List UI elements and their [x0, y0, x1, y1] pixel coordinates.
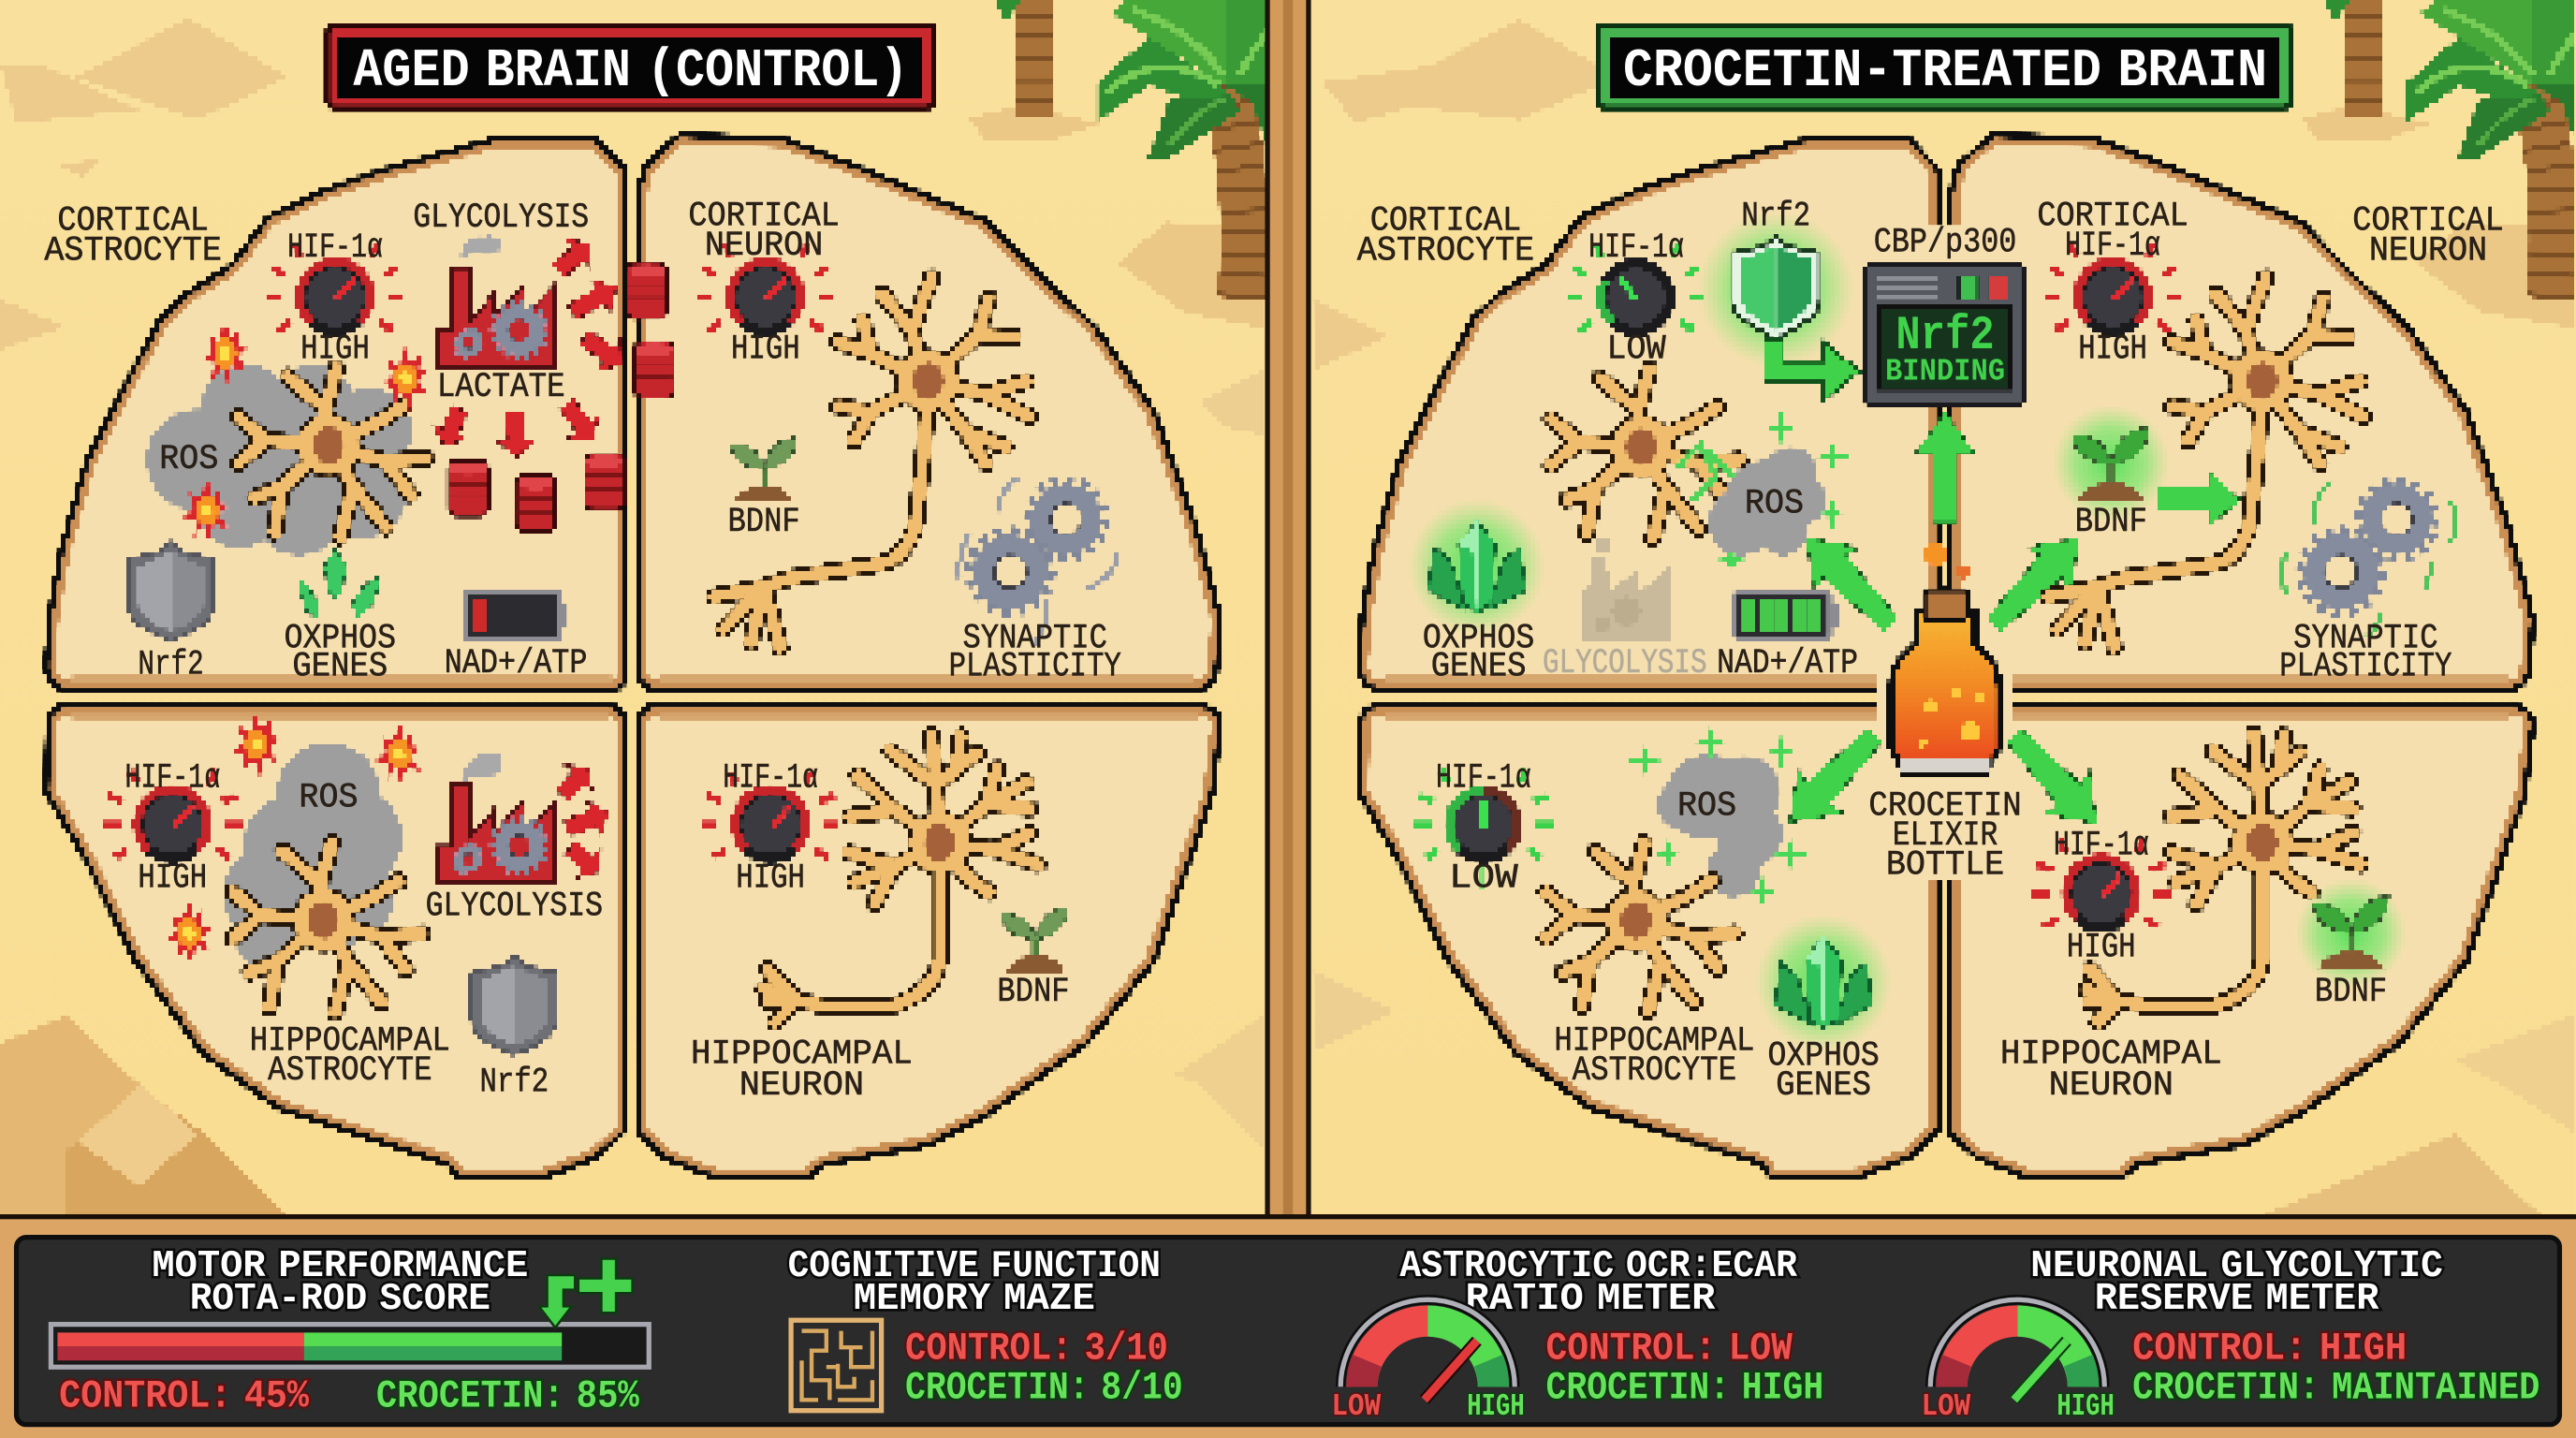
label: NAD+/ATP: NAD+/ATP [1717, 644, 1858, 683]
label: high: HIGH [2067, 928, 2136, 967]
explosions: ROS damage [184, 320, 429, 544]
label: plasticity: PLASTICITY [949, 647, 1121, 686]
icon: cortical astrocyte cell [238, 368, 427, 537]
label: Nrf2: Nrf2 [479, 1063, 549, 1102]
label: cortical neuron: CORTICAL [688, 197, 840, 236]
panel: aged brain control [44, 23, 1214, 1171]
glycolysis arrows hippocampal [548, 755, 615, 887]
icon: hippocampal astrocyte cell [233, 843, 422, 1012]
label: high: HIGH [736, 859, 805, 899]
label: ROS: ROS [1745, 485, 1804, 524]
label: HIF: HIF-1α [723, 759, 818, 799]
icon: CBP/p300 terminal screen [1866, 265, 2023, 406]
panel: crocetin-treated brain [1357, 23, 2526, 1171]
title: crocetin-treated brain: CROCETIN-TREATED BRAIN [1623, 41, 2267, 102]
droplets: orange elixir [1924, 542, 1970, 580]
label: ROS: ROS [159, 440, 218, 479]
ROS cloud hippocampal astrocyte [224, 742, 402, 968]
icon: hippocampal neuron treated [2086, 735, 2361, 1022]
lactate arrows [426, 228, 634, 458]
icon: glycolysis factory with smoke [439, 236, 555, 366]
label: high: HIGH [138, 859, 207, 899]
label: BDNF: BDNF [2075, 503, 2147, 542]
label: neuron: NEURON [705, 227, 823, 266]
icon: cortical neuron cell [714, 278, 1030, 648]
ROS cloud cortical astrocyte [146, 365, 413, 555]
arrow: BDNF to plasticity [2159, 473, 2241, 526]
icon: glowing Nrf2 shield [1697, 211, 1855, 368]
parchment patches around bottle and CBP label [1873, 227, 2017, 881]
label: synaptic: SYNAPTIC [962, 620, 1107, 659]
label: hippocampal: HIPPOCAMPAL [250, 1022, 450, 1062]
lactate barrels [448, 263, 674, 531]
label: ROS: ROS [1677, 787, 1736, 827]
title plate: aged brain frame [326, 23, 936, 110]
icon: Nrf2 grey shield [128, 542, 213, 640]
icon: memory maze [791, 1320, 882, 1411]
label: high: HIGH [731, 330, 800, 370]
label: neuron: NEURON [739, 1066, 864, 1106]
label: low: LOW [1606, 330, 1667, 370]
label: cortical: CORTICAL [1370, 202, 1521, 242]
value: control memory: CONTROL: 3/10 [905, 1326, 1168, 1371]
explosions: hippocampal ROS [166, 712, 422, 966]
value: crocetin memory: CROCETIN: 8/10 [905, 1366, 1183, 1411]
icon: small OXPHOS crystals [300, 549, 381, 618]
label: elixir: ELIXIR [1893, 816, 1998, 856]
value: control motor: CONTROL: 45% [59, 1373, 310, 1418]
gauge: HIF-1a low cortical astrocyte [1567, 243, 1705, 337]
heading: motor performance: MOTOR PERFORMANCE [152, 1245, 528, 1288]
label: plasticity: PLASTICITY [2279, 647, 2452, 686]
heading: neuronal glycolytic: NEURONAL GLYCOLYTIC [2030, 1245, 2443, 1288]
gauge: HIF-1a high hippocampal neuron [701, 770, 840, 864]
label: HIF: HIF-1α [2054, 827, 2149, 866]
icon: hippocampal astrocyte treated [1546, 843, 1734, 1012]
icon: faded glycolysis factory [1584, 537, 1669, 640]
screen text: Nrf2: Nrf2 [1895, 310, 1995, 363]
icon: hippocampal neuron cell [764, 735, 1038, 1022]
label: HIF: HIF-1α [1588, 228, 1684, 268]
label: high: HIGH [300, 330, 370, 370]
gauge: HIF-1a high cortical neuron treated [2043, 243, 2182, 337]
label: CBP/p300: CBP/p300 [1874, 224, 2016, 263]
panel: results HUD [0, 1214, 2576, 1438]
icon: glycolysis factory hippocampal [439, 752, 555, 882]
brain outline: aged brain four lobes [52, 141, 1214, 1171]
heading: astrocytic ratio: ASTROCYTIC OCR:ECAR [1399, 1245, 1798, 1288]
arrow: Nrf2 to CBP/p300 [1764, 340, 1860, 401]
icon: cortical neuron treated [2049, 278, 2364, 648]
label: hippocampal: HIPPOCAMPAL [1554, 1022, 1754, 1062]
icon: glowing OXPHOS crystal [1408, 498, 1546, 636]
label: hippocampal: HIPPOCAMPAL [691, 1035, 913, 1075]
arrow: bottle to BDNF [1972, 516, 2102, 647]
value: crocetin ratio: CROCETIN: HIGH [1546, 1366, 1823, 1411]
gauge label: low: LOW [1922, 1389, 1970, 1425]
gauge: HIF-1a low hippocampal astrocyte [1414, 770, 1553, 890]
gauge label: high: HIGH [2056, 1389, 2115, 1425]
HUD frame [0, 1214, 2576, 1438]
label: astrocyte: ASTROCYTE [268, 1051, 432, 1091]
label: cortical astrocyte: CORTICAL [57, 202, 209, 242]
label: crocetin: CROCETIN [1868, 787, 2022, 827]
label: genes: GENES [292, 647, 388, 686]
label: glycolysis: GLYCOLYSIS [413, 198, 589, 238]
heading: cognitive function: COGNITIVE FUNCTION [788, 1245, 1161, 1288]
label: BDNF: BDNF [728, 503, 800, 542]
ROS cloud reduced hippocampal [1658, 755, 1782, 897]
label: BDNF: BDNF [2315, 973, 2387, 1012]
label: neuron: NEURON [2369, 231, 2487, 271]
arrow: bottle to CBP/p300 [1916, 412, 1974, 522]
gauge label: low: LOW [1332, 1389, 1381, 1425]
icon: synaptic plasticity gears [959, 477, 1117, 644]
ROS cloud reduced cortical [1676, 444, 1827, 555]
icon: Nrf2 grey shield hippocampal [472, 956, 557, 1055]
icon: cortical astrocyte treated [1551, 370, 1740, 539]
gauge: HIF-1a high hippocampal neuron treated [2032, 840, 2170, 933]
arrow: bottle to hippocampal neuron [1991, 714, 2119, 845]
heading: memory maze: MEMORY MAZE [854, 1278, 1095, 1321]
gauge: HIF-1a high hippocampal astrocyte [104, 770, 242, 864]
icon: crocetin elixir bottle [1891, 590, 1999, 775]
icon: dull BDNF sprout [731, 437, 797, 503]
value: crocetin motor: CROCETIN: 85% [376, 1373, 639, 1418]
gauge: OCR:ECAR ratio [1340, 1299, 1515, 1400]
label: oxphos: OXPHOS [1767, 1036, 1880, 1076]
sparkles hippocampal [1628, 726, 1808, 907]
palm tree right near [2407, 0, 2576, 299]
heading: reserve meter: RESERVE METER [2095, 1278, 2379, 1321]
palm tree left near [1097, 0, 1298, 299]
label: neuron: NEURON [2049, 1066, 2174, 1106]
brain outline: crocetin brain four lobes [1365, 141, 2526, 1171]
icon: dull BDNF sprout hippocampal [1003, 907, 1068, 973]
bar chart: rota-rod score [51, 1325, 649, 1367]
label: synaptic: SYNAPTIC [2293, 620, 2438, 659]
label: BDNF: BDNF [997, 973, 1070, 1012]
heading: rota-rod score: ROTA-ROD SCORE [190, 1278, 490, 1321]
gauge: HIF-1a high cortical neuron [696, 243, 835, 337]
title: aged brain: AGED BRAIN (CONTROL) [353, 41, 909, 102]
sparkles cortical [1715, 411, 1850, 577]
label: ROS: ROS [299, 779, 359, 818]
heading: ratio meter: RATIO METER [1466, 1278, 1716, 1321]
label: faded glycolysis: GLYCOLYSIS [1543, 644, 1707, 683]
label: low: LOW [1449, 859, 1519, 899]
label: HIF: HIF-1α [2065, 227, 2160, 266]
label: cortical: CORTICAL [2037, 197, 2188, 236]
palm tree left distant [994, 0, 1035, 118]
label: astrocyte: ASTROCYTE [44, 231, 222, 271]
palm tree right distant [2323, 0, 2364, 118]
icon: full green battery [1734, 592, 1838, 639]
label: high: HIGH [2078, 330, 2147, 370]
icon: gears active [2282, 479, 2456, 638]
label: HIF: HIF-1α [1436, 759, 1531, 799]
gauge: glycolytic reserve [1930, 1299, 2104, 1400]
title plate: crocetin frame [1595, 23, 2293, 110]
label: astrocyte: ASTROCYTE [1573, 1051, 1736, 1091]
gauge: HIF-1a high cortical astrocyte [266, 243, 404, 337]
icon: glowing BDNF sprout [2052, 404, 2170, 522]
label: cortical: CORTICAL [2352, 202, 2504, 242]
label: hippocampal: HIPPOCAMPAL [2000, 1035, 2222, 1075]
icon: green plus and arrow [539, 1258, 633, 1328]
icon: nearly empty battery [465, 592, 568, 639]
gauge label: high: HIGH [1467, 1389, 1525, 1425]
label: lactate: LACTATE [437, 368, 565, 407]
screen text: binding: BINDING [1885, 354, 2005, 389]
label: astrocyte: ASTROCYTE [1357, 231, 1534, 271]
label: genes: GENES [1776, 1066, 1871, 1106]
label: oxphos: OXPHOS [1423, 620, 1534, 659]
icon: glowing OXPHOS crystal hippocampal [1754, 914, 1893, 1051]
value: control ratio: CONTROL: LOW [1546, 1326, 1793, 1371]
central wooden divider [1265, 0, 1311, 1219]
arrow: bottle to ROS [1783, 516, 1913, 647]
label: glycolysis: GLYCOLYSIS [426, 888, 603, 927]
label: genes: GENES [1431, 647, 1526, 686]
label: oxphos: OXPHOS [285, 620, 396, 659]
label: HIF: HIF-1α [287, 228, 383, 268]
label: bottle: BOTTLE [1886, 846, 2004, 886]
value: control reserve: CONTROL: HIGH [2132, 1326, 2407, 1371]
arrow: bottle to hippocampal astrocyte [1767, 714, 1897, 844]
icon: glowing BDNF sprout hippocampal [2295, 877, 2407, 990]
label: Nrf2: Nrf2 [1741, 197, 1810, 236]
label: HIF: HIF-1α [124, 759, 220, 799]
label: Nrf2: Nrf2 [138, 646, 204, 685]
label: NAD+/ATP: NAD+/ATP [445, 644, 587, 683]
